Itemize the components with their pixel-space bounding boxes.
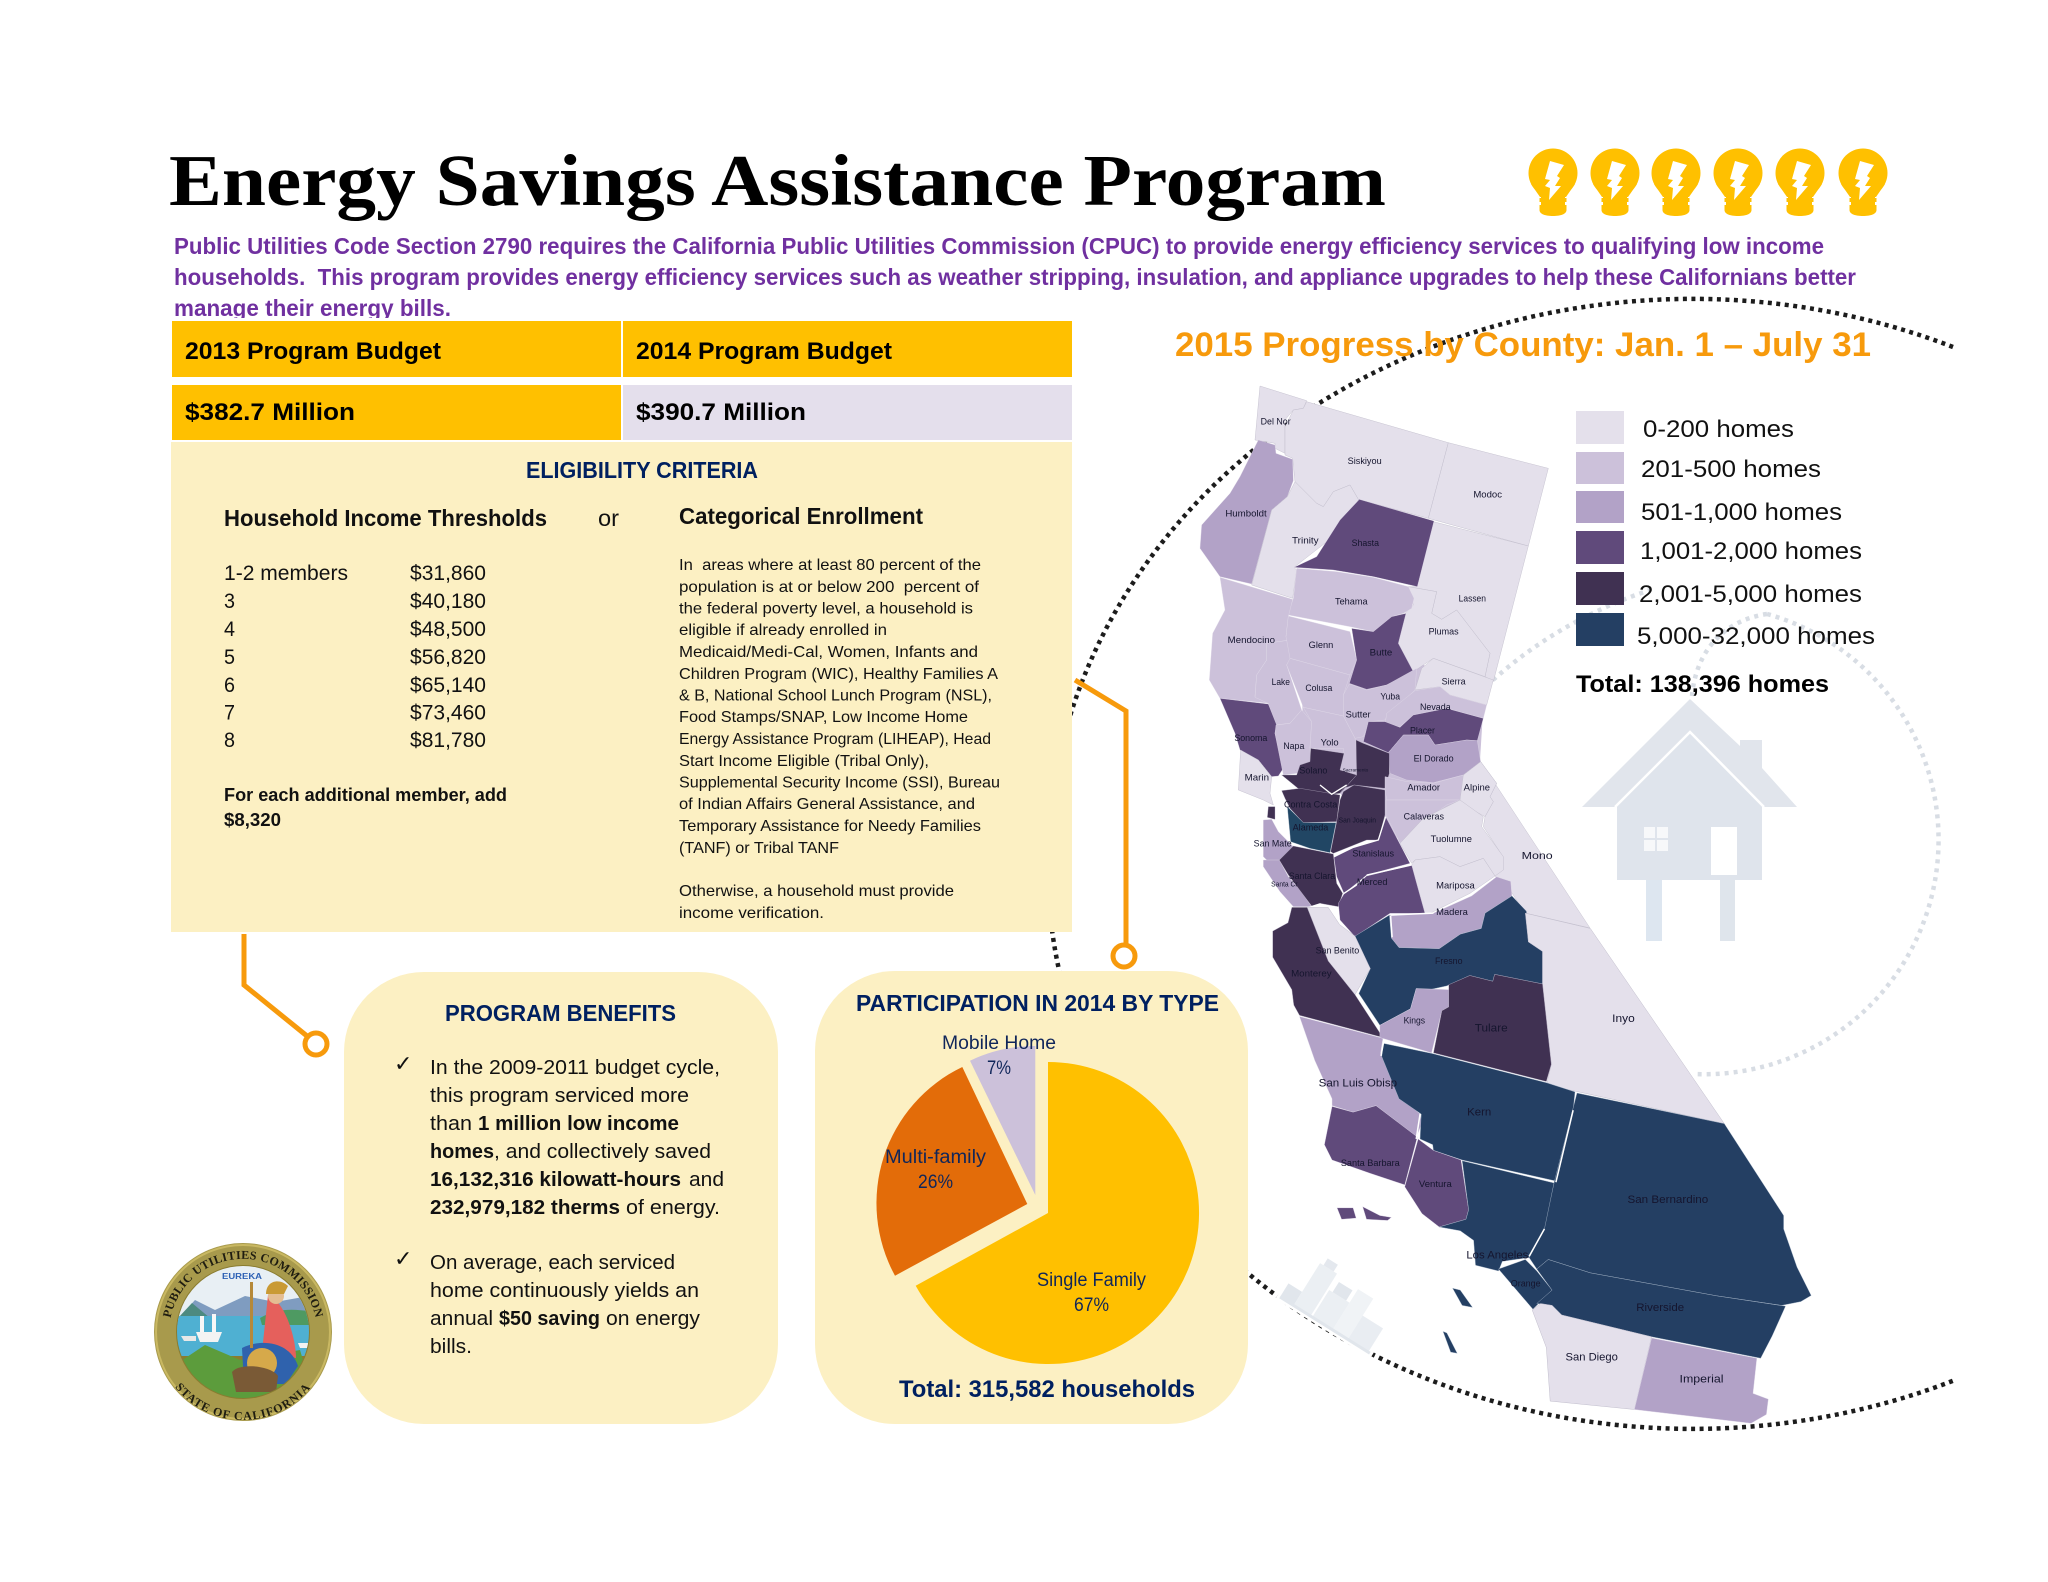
categorical enrollment column: the federal poverty level, a household is [679, 600, 973, 618]
northern counties [1200, 386, 1590, 928]
county labels south: Santa Cr [1271, 881, 1298, 888]
heading: participation: PARTICIPATION IN 2014 BY TYPE [856, 990, 1219, 1016]
pie chart: 7% [987, 1058, 1011, 1079]
county labels north: Sutter [1346, 709, 1371, 719]
bullet one: 16,132,316 kilowatt-hours [430, 1168, 681, 1191]
county labels north: Modoc [1473, 489, 1503, 499]
intro text: Public Utilities Code Section 2790 requires the California Public Utilities Commission (CPUC) to provide energy efficiency services to qualifying low income [174, 233, 1824, 259]
county labels south: Merced [1357, 877, 1388, 888]
income thresholds column: $73,460 [410, 702, 486, 724]
county labels north: San Mate [1254, 839, 1292, 849]
county labels north: Yuba [1380, 691, 1400, 701]
county labels north: Humboldt [1225, 509, 1267, 519]
income thresholds column: $65,140 [410, 674, 486, 697]
pie chart: 26% [918, 1172, 953, 1193]
county labels north: Sierra [1442, 677, 1466, 687]
categorical enrollment column: Medicaid/Medi-Cal, Women, Infants and [679, 644, 978, 661]
categorical enrollment column: In areas where at least 80 percent of the [679, 557, 981, 574]
county labels south: Kern [1467, 1107, 1491, 1119]
county labels south: Madera [1436, 907, 1469, 918]
income thresholds column: $81,780 [410, 729, 486, 752]
county labels south: Kings [1404, 1016, 1425, 1027]
icon: state seal: EUREKA [222, 1272, 262, 1281]
icon: state seal [154, 1243, 332, 1421]
county labels north: Marin [1245, 772, 1269, 782]
bullet two: $50 saving [499, 1307, 600, 1330]
county labels south: Inyo [1612, 1013, 1635, 1025]
bullet two: On average, each serviced [430, 1251, 675, 1274]
total households: Total: 315,582 households [899, 1376, 1195, 1403]
county labels north: Napa [1283, 741, 1304, 751]
bullet two: bills. [430, 1335, 472, 1358]
bullet one: 232,979,182 therms [430, 1196, 620, 1219]
categorical enrollment column: Otherwise, a household must provide [679, 883, 954, 900]
bullet one: 1 million low income [478, 1112, 679, 1135]
county labels north: Sacramento [1343, 767, 1369, 773]
bullet one: In the 2009-2011 budget cycle, [430, 1056, 720, 1079]
categorical enrollment column: (TANF) or Tribal TANF [679, 840, 839, 857]
icon: state seal: STATE OF CALIFORNIA [176, 1383, 310, 1420]
intro text: households. This program provides energy efficiency services such as weather stripping, insulation, and appliance upgrades to help these Californians better [174, 264, 1856, 290]
map legend: 201-500 homes [1641, 456, 1821, 483]
county labels south: Orange [1511, 1278, 1541, 1289]
county labels south: Los Angeles [1466, 1249, 1528, 1261]
heading: program benefits: PROGRAM BENEFITS [445, 1000, 676, 1026]
county labels north: Tuolumne [1431, 834, 1472, 844]
icon: state seal: PUBLIC UTILITIES COMMISSION [162, 1250, 324, 1318]
income thresholds column: $31,860 [410, 562, 486, 585]
income thresholds column: 8 [224, 729, 235, 752]
panel: participation by type [815, 971, 1248, 1424]
categorical enrollment column [679, 503, 1000, 922]
county labels north: Butte [1370, 648, 1392, 658]
county labels south [1271, 871, 1724, 1386]
icons: light bulbs [1528, 148, 1888, 216]
budget table: $390.7 Million [636, 399, 806, 426]
county labels south: San Benito [1316, 945, 1359, 956]
income thresholds column: 7 [224, 702, 235, 724]
icon: house [1582, 699, 1797, 941]
panel: eligibility criteria [171, 442, 1072, 932]
county labels north: Tehama [1335, 597, 1368, 607]
categorical enrollment column: Categorical Enrollment [679, 503, 923, 529]
bullet two [394, 1247, 701, 1358]
map legend: 1,001-2,000 homes [1640, 538, 1862, 565]
pie chart [876, 1033, 1199, 1364]
map legend: Total: 138,396 homes [1576, 671, 1829, 698]
county labels south: Mariposa [1436, 880, 1475, 891]
county labels south: San Bernardino [1627, 1194, 1708, 1206]
bullet one: ✓ [394, 1052, 412, 1077]
county labels north: Mono [1522, 851, 1553, 862]
county labels north: San Joaquin [1339, 818, 1376, 825]
county labels north: Del Nor [1261, 417, 1291, 427]
title: Energy Savings Assistance Program [169, 140, 1386, 221]
pie chart: Multi-family [885, 1147, 987, 1168]
categorical enrollment column: income verification. [679, 905, 824, 922]
dotted ellipse backdrop [1048, 299, 1955, 1429]
county labels south: Monterey [1291, 968, 1332, 979]
income thresholds column: or [598, 505, 619, 531]
county labels south: San Diego [1565, 1352, 1618, 1364]
bullet one [394, 1052, 724, 1219]
income thresholds column: 1-2 members [224, 562, 348, 585]
county labels south: Tulare [1475, 1022, 1508, 1034]
county labels north: Lassen [1459, 594, 1486, 604]
county labels south: Riverside [1636, 1302, 1684, 1314]
bullet two: ✓ [394, 1247, 412, 1272]
map legend: 0-200 homes [1643, 416, 1794, 443]
county labels north: Solano [1299, 766, 1327, 776]
white strip clipping intro text [165, 318, 565, 322]
county labels north: El Dorado [1414, 754, 1454, 764]
heading: progress by county: 2015 Progress by County: Jan. 1 – July 31 [1175, 326, 1871, 364]
bullet one: , and collectively saved [494, 1140, 711, 1163]
income thresholds column: For each additional member, add [224, 785, 507, 805]
icon: city skyline [1275, 1236, 1410, 1358]
income thresholds column [224, 505, 619, 830]
bullet one: than [430, 1112, 472, 1135]
categorical enrollment column: of Indian Affairs General Assistance, and [679, 796, 975, 813]
county labels north: Contra Costa [1284, 799, 1337, 809]
income thresholds column: 5 [224, 646, 235, 669]
county labels north: Mendocino [1228, 635, 1275, 645]
county labels north: Amador [1407, 782, 1440, 792]
categorical enrollment column: & B, National School Lunch Program (NSL), [679, 688, 992, 704]
county labels north [1225, 417, 1553, 862]
budget table: $382.7 Million [185, 399, 355, 426]
county labels north: Alpine [1464, 782, 1490, 792]
county labels north: Calaveras [1404, 811, 1444, 821]
income thresholds column: $48,500 [410, 618, 486, 641]
county labels north: Sonoma [1234, 733, 1267, 743]
income thresholds column: $56,820 [410, 646, 486, 669]
county labels south: Imperial [1680, 1374, 1724, 1386]
connector: map to participation [1075, 680, 1126, 945]
income thresholds column: 3 [224, 590, 235, 613]
pie chart: 67% [1074, 1295, 1109, 1316]
heading: eligibility criteria: ELIGIBILITY CRITERIA [526, 457, 758, 483]
budget table: 2014 Program Budget [636, 338, 892, 365]
budget table [172, 321, 1072, 440]
bullet one: of energy. [626, 1196, 720, 1219]
map of California counties [1200, 386, 1811, 1423]
categorical enrollment column: eligible if already enrolled in [679, 622, 887, 639]
bullet two: annual [430, 1307, 493, 1330]
county labels north: Plumas [1429, 627, 1459, 637]
intro text [174, 233, 1856, 321]
categorical enrollment column: population is at or below 200 percent of [679, 579, 980, 596]
income thresholds column: 4 [224, 618, 235, 641]
county labels north: Yolo [1321, 737, 1339, 747]
southern counties [1273, 877, 1811, 1423]
county labels north: Nevada [1420, 702, 1451, 712]
income thresholds column: $40,180 [410, 590, 486, 613]
bullet one: this program serviced more [430, 1084, 689, 1107]
income thresholds column: Household Income Thresholds [224, 505, 547, 531]
map legend: 501-1,000 homes [1641, 499, 1842, 526]
county labels north: Lake [1272, 677, 1290, 687]
county labels north: Colusa [1305, 683, 1332, 693]
budget table: 2013 Program Budget [185, 338, 441, 365]
bullet two: home continuously yields an [430, 1279, 699, 1302]
county labels north: Alameda [1293, 822, 1328, 832]
income thresholds column: $8,320 [224, 810, 281, 830]
county labels south: Ventura [1419, 1179, 1452, 1190]
map legend [1576, 411, 1875, 698]
county labels south: Santa Clara [1289, 871, 1336, 882]
pie chart: Single Family [1037, 1270, 1146, 1291]
categorical enrollment column: Children Program (WIC), Healthy Families A [679, 666, 999, 683]
bullet one: and [689, 1168, 724, 1191]
connector ring: benefits [305, 1033, 327, 1055]
county labels south: Santa Barbara [1341, 1158, 1400, 1169]
categorical enrollment column: Energy Assistance Program (LIHEAP), Head [679, 731, 991, 748]
connector: eligibility to benefits [244, 934, 307, 1036]
county labels south: Fresno [1435, 956, 1463, 967]
light dotted circle around house [1493, 590, 1939, 1074]
map legend: 2,001-5,000 homes [1639, 581, 1862, 608]
county labels north: Shasta [1352, 538, 1379, 548]
pie chart: Mobile Home [942, 1033, 1056, 1054]
map legend: 5,000-32,000 homes [1637, 623, 1875, 650]
bullet two: on energy [606, 1307, 701, 1330]
county labels south: San Luis Obisp [1319, 1078, 1397, 1090]
county labels north: Placer [1410, 725, 1435, 735]
county labels north: Siskiyou [1348, 456, 1382, 466]
county labels north: Glenn [1309, 640, 1333, 650]
bullet one: homes [430, 1140, 494, 1163]
intro text: manage their energy bills. [174, 295, 451, 321]
county labels north: Stanislaus [1352, 848, 1395, 858]
county labels north: Trinity [1292, 535, 1319, 545]
panel: program benefits [344, 972, 778, 1424]
connector ring: participation [1113, 945, 1135, 967]
categorical enrollment column: Start Income Eligible (Tribal Only), [679, 753, 929, 770]
categorical enrollment column: Food Stamps/SNAP, Low Income Home [679, 709, 968, 726]
categorical enrollment column: Temporary Assistance for Needy Families [679, 818, 981, 835]
income thresholds column: 6 [224, 674, 235, 697]
bay area and central counties [1263, 785, 1503, 937]
categorical enrollment column: Supplemental Security Income (SSI), Bureau [679, 774, 1000, 792]
